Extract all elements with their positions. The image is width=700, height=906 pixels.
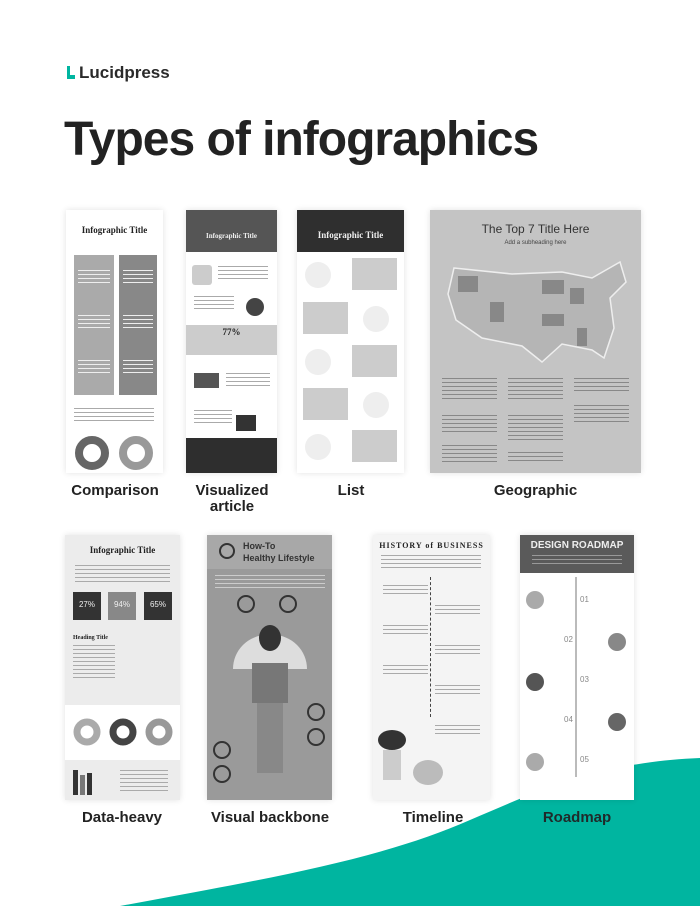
panel: data-heavy: Heading Title bbox=[73, 635, 108, 641]
panel: comparison: Infographic Title bbox=[82, 225, 147, 235]
text: Geographic bbox=[494, 482, 577, 499]
panel: roadmap bbox=[520, 535, 634, 800]
panel: visual backbone: How-To bbox=[243, 541, 275, 551]
panel: data-heavy: Infographic Title bbox=[90, 545, 155, 555]
text: List bbox=[338, 482, 364, 499]
text: Comparison bbox=[71, 482, 159, 499]
panel: data-heavy: 65% bbox=[150, 600, 166, 609]
panel: visual backbone bbox=[207, 535, 332, 800]
panel: list: Infographic Title bbox=[318, 230, 383, 240]
text: Data-heavy bbox=[82, 809, 162, 826]
panel: visualized article: Infographic Title bbox=[206, 232, 257, 240]
panel: timeline bbox=[373, 535, 490, 800]
panel: roadmap: 01 bbox=[580, 595, 589, 604]
panel: roadmap: 05 bbox=[580, 755, 589, 764]
panel: geographic: Add a subheading here bbox=[504, 240, 567, 246]
panel: visual backbone: Healthy Lifestyle bbox=[243, 553, 315, 563]
icon: logo mark bbox=[67, 66, 75, 79]
panel: data-heavy: 27% bbox=[79, 600, 95, 609]
panel: roadmap: 04 bbox=[564, 715, 573, 724]
text: Roadmap bbox=[543, 809, 611, 826]
title: Types of infographics bbox=[64, 113, 538, 166]
panel: data-heavy bbox=[65, 535, 180, 800]
logo: Lucidpress bbox=[79, 63, 170, 82]
text: article bbox=[210, 498, 254, 515]
text: Visual backbone bbox=[211, 809, 329, 826]
panel: list bbox=[297, 210, 404, 473]
text: Visualized bbox=[195, 482, 269, 499]
panel: visualized article bbox=[186, 210, 277, 473]
panel: data-heavy: 94% bbox=[114, 600, 130, 609]
panel: roadmap: 03 bbox=[580, 675, 589, 684]
panel: geographic bbox=[430, 210, 641, 473]
panel: roadmap: 02 bbox=[564, 635, 573, 644]
panel: visualized article: 77% bbox=[222, 327, 240, 337]
panel: comparison bbox=[66, 210, 163, 473]
panel: geographic: The Top 7 Title Here bbox=[482, 222, 589, 236]
text: Timeline bbox=[403, 809, 463, 826]
panel: roadmap: DESIGN ROADMAP bbox=[531, 540, 623, 551]
panel: timeline: HISTORY of BUSINESS bbox=[379, 541, 484, 550]
